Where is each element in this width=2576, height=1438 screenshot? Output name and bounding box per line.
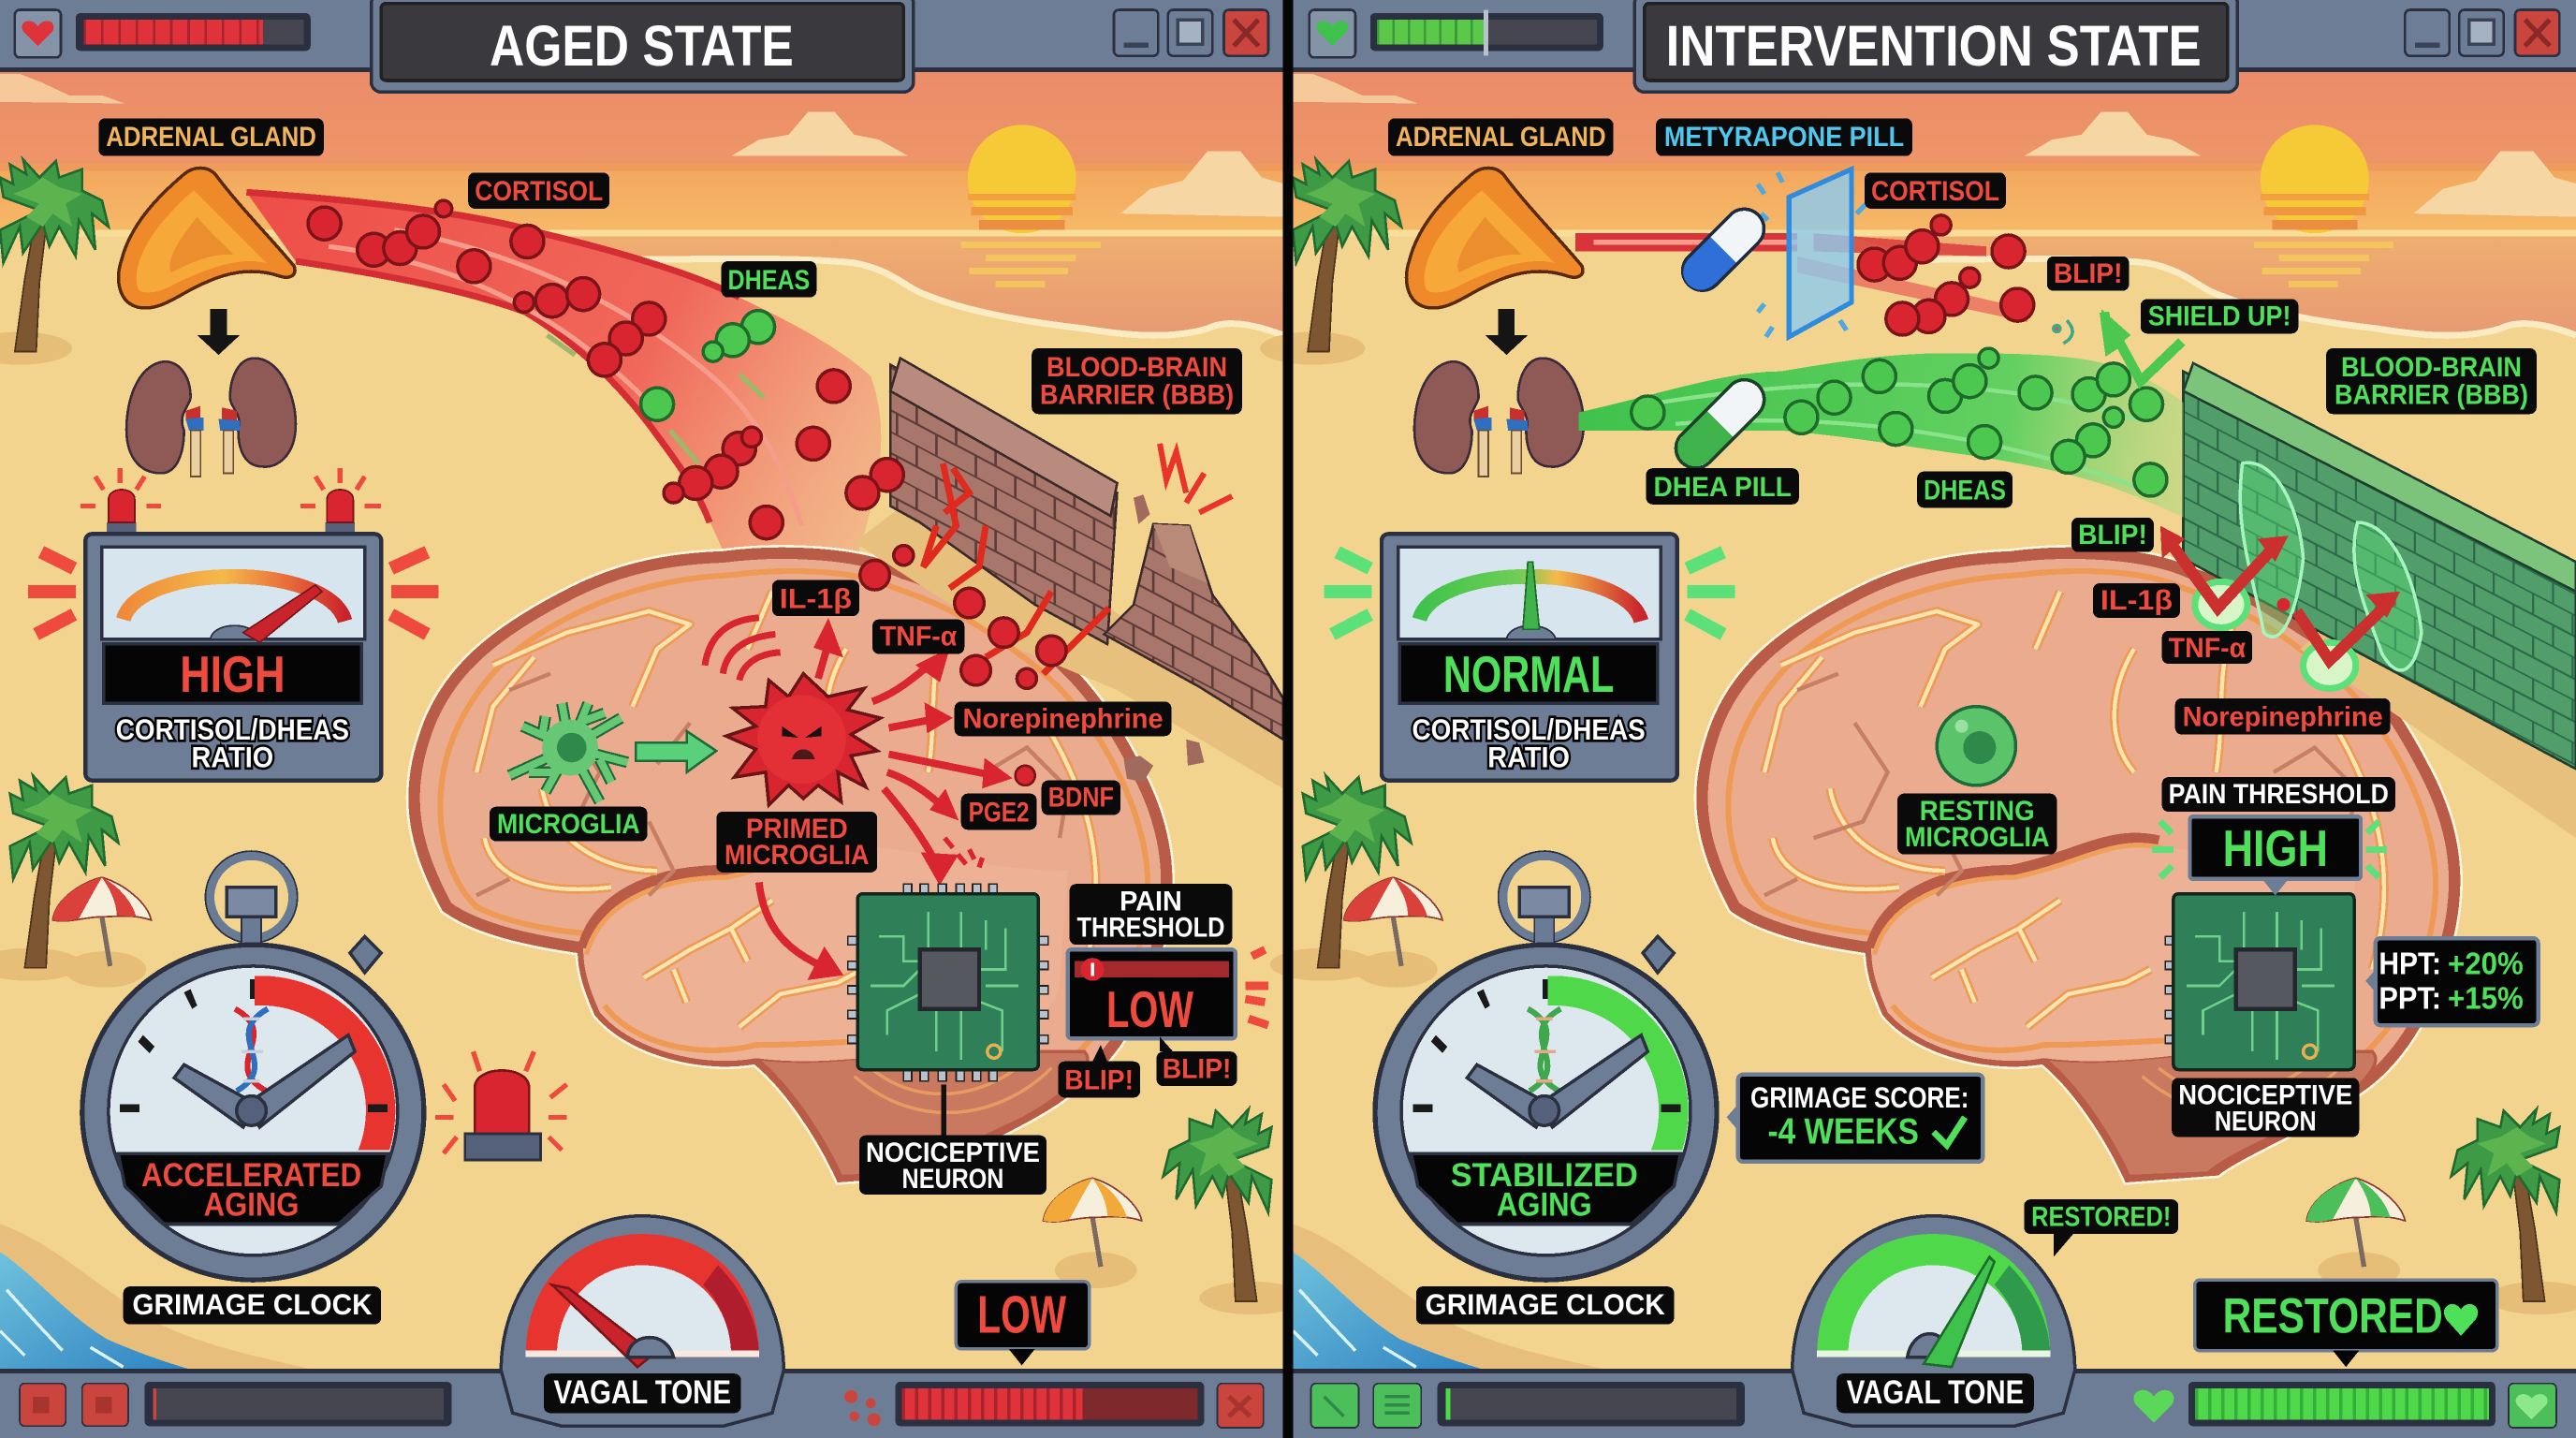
vagal tone gauge restored: VAGAL TONE [1847, 1374, 2024, 1411]
green shield arrow [2101, 309, 2182, 381]
label: IL-1β: IL-1β [780, 583, 852, 614]
kidneys [126, 309, 296, 477]
panel divider [1283, 0, 1293, 1438]
callout: grimage score [1727, 1075, 1983, 1162]
label: adrenal gland: ADRENAL GLAND [1396, 122, 1606, 153]
title [1634, 0, 2237, 92]
palm tree middle left [0, 775, 118, 981]
label: nociceptive neuron: NOCICEPTIVE [866, 1137, 1040, 1168]
label: nociceptive neuron [2172, 1078, 2359, 1137]
bottom left empty bar [145, 1382, 452, 1426]
title [372, 0, 914, 92]
palm tree top left [0, 159, 109, 365]
label: cortisol: CORTISOL [475, 176, 603, 207]
bottom status bar [1293, 1369, 2576, 1438]
label: IL-1β [772, 580, 859, 616]
blood-brain barrier wall, intact [2183, 363, 2576, 838]
beach umbrella green [2306, 1178, 2405, 1288]
label: nociceptive neuron: NOCICEPTIVE [2178, 1079, 2352, 1110]
pain threshold indicator: low: LOW [1106, 981, 1194, 1038]
arrow: microglia to primed [636, 731, 716, 772]
brain [414, 553, 1166, 1177]
adrenal gland [119, 168, 295, 308]
label: cortisol: CORTISOL [1871, 176, 1999, 207]
label: BDNF: BDNF [1048, 783, 1114, 814]
grimage clock, stabilized: STABILIZED [1451, 1157, 1638, 1194]
top title bar [1293, 0, 2576, 92]
grimage clock, stabilized: AGING [1497, 1187, 1592, 1224]
label: blood-brain barrier [1032, 348, 1242, 414]
label: shield up: SHIELD UP! [2148, 301, 2291, 331]
label: pain threshold [1070, 884, 1232, 945]
blip label 1: BLIP! [1064, 1065, 1134, 1096]
bottom right green bar [2188, 1382, 2496, 1426]
panel: aged state [0, 0, 1305, 1438]
label: primed microglia: PRIMED [746, 814, 848, 844]
metyrapone shield [1758, 169, 1866, 337]
brain [1702, 553, 2454, 1177]
cortisol dheas ratio meter, high: CORTISOL/DHEAS [116, 712, 349, 746]
label: nociceptive neuron: NEURON [902, 1164, 1003, 1195]
cortisol dheas ratio meter, normal [1325, 534, 1734, 781]
label: TNF-α: TNF-α [2169, 633, 2247, 664]
primed microglia [726, 674, 881, 805]
DHEA pill [1668, 372, 1772, 477]
microglia [509, 703, 627, 801]
vagal tone gauge low: VAGAL TONE [554, 1374, 731, 1411]
window buttons [1114, 10, 1268, 56]
beach background [0, 72, 1284, 1384]
dna helix [235, 1009, 268, 1091]
deflected red arrows [2160, 526, 2400, 688]
bottom right button [1218, 1384, 1264, 1428]
label: restored: RESTORED! [2031, 1201, 2171, 1232]
label: primed microglia: MICROGLIA [724, 840, 869, 871]
label: pain threshold: PAIN THRESHOLD [2169, 779, 2389, 810]
callout: HPT PPT: HPT: [2378, 947, 2441, 982]
protective shield halos on wall [2240, 462, 2422, 670]
small cytokine dot [1016, 766, 1035, 785]
label: restored [2024, 1199, 2178, 1257]
label: adrenal gland: ADRENAL GLAND [106, 122, 316, 153]
label: blood-brain barrier: BLOOD-BRAIN [1046, 352, 1227, 383]
label: blood-brain barrier: BARRIER (BBB) [2334, 380, 2528, 411]
grimage clock, accelerated: ACCELERATED [141, 1157, 361, 1194]
cortisol dheas ratio meter, high: HIGH [180, 646, 285, 703]
label: grimage clock: GRIMAGE CLOCK [132, 1287, 373, 1321]
cortisol dheas ratio meter, high [28, 468, 439, 781]
deflected particles [2054, 320, 2072, 344]
virus icon [844, 1390, 881, 1426]
beach background [1293, 72, 2576, 1384]
callout: HPT PPT: +20% [2448, 947, 2524, 982]
label: primed microglia [716, 812, 877, 873]
blip label 2: BLIP! [1163, 1053, 1231, 1084]
grimage clock, stabilized [1375, 851, 1717, 1280]
bottom right red bar [896, 1382, 1204, 1426]
pain threshold indicator: low [1068, 949, 1268, 1038]
palm tree bottom right [1164, 1109, 1305, 1314]
bottom status bar [0, 1369, 1283, 1438]
alarms and sparks [28, 468, 439, 634]
nociceptive neuron chip [848, 884, 1048, 1081]
bottom right heart button [2509, 1384, 2556, 1428]
DHEAS molecules [1632, 348, 2167, 496]
label: metyrapone pill: METYRAPONE PILL [1664, 122, 1904, 153]
grimage clock, accelerated [82, 851, 424, 1280]
blip label 2 [1157, 1036, 1237, 1086]
callout: grimage score: GRIMAGE SCORE: [1750, 1080, 1969, 1114]
label: grimage clock: GRIMAGE CLOCK [1426, 1287, 1665, 1321]
palm tree bottom right [2452, 1109, 2576, 1314]
callout: HPT PPT: PPT: [2378, 982, 2441, 1017]
label: resting microglia: RESTING [1920, 796, 2035, 827]
bottom left buttons [20, 1384, 128, 1426]
label: microglia: MICROGLIA [497, 809, 640, 840]
label: norepinephrine: Norepinephrine [2183, 702, 2383, 733]
health bar [1370, 10, 1603, 56]
cortisol molecules [1858, 215, 2034, 335]
cortisol beam blocked [1575, 233, 2027, 322]
icon: heart [2133, 1390, 2174, 1423]
window buttons [2405, 10, 2559, 56]
label: blood-brain barrier [2326, 348, 2537, 414]
icon: heart [15, 10, 61, 57]
label: blood-brain barrier: BLOOD-BRAIN [2341, 352, 2522, 383]
label: blip green: BLIP! [2078, 520, 2147, 550]
label: resting microglia [1897, 794, 2056, 855]
signal waves and cytokine arrows [705, 618, 1005, 976]
title: INTERVENTION STATE [1666, 14, 2202, 79]
metyrapone pill [1675, 201, 1772, 299]
label: nociceptive neuron: NEURON [2215, 1106, 2317, 1137]
label: pain threshold: PAIN [1120, 886, 1182, 917]
label: IL-1β [2093, 583, 2180, 618]
palm tree top left [1260, 159, 1401, 365]
vagal status: low: LOW [977, 1284, 1066, 1343]
panel: intervention state [1260, 0, 2576, 1438]
bottom left buttons [1311, 1384, 1421, 1428]
dna helix [1528, 1009, 1560, 1091]
DHEAS molecules [641, 311, 775, 420]
label: pain threshold: THRESHOLD [1076, 912, 1224, 943]
stream highlights [1660, 384, 2152, 493]
label: resting microglia: MICROGLIA [1905, 822, 2049, 853]
beach umbrella red [52, 877, 152, 988]
blip label 1 [1058, 1045, 1140, 1097]
cortisol dheas ratio meter, normal: NORMAL [1443, 646, 1614, 703]
health bar [76, 13, 311, 51]
label: norepinephrine: Norepinephrine [963, 703, 1164, 734]
label: nociceptive neuron [859, 1084, 1046, 1195]
adrenal gland [1407, 168, 1583, 308]
cortisol dheas ratio meter, high: RATIO [192, 741, 273, 774]
kidneys [1414, 309, 1584, 477]
vagal status: restored [2195, 1280, 2497, 1367]
grimage clock, accelerated: AGING [204, 1187, 299, 1224]
pain threshold indicator: high [2152, 816, 2387, 895]
nociceptive neuron chip [2165, 894, 2354, 1070]
label: TNF-α: TNF-α [880, 622, 958, 653]
label: DHEAS: DHEAS [1924, 476, 2006, 506]
beach umbrella orange [1044, 1178, 1142, 1288]
cortisol dheas ratio meter, normal: CORTISOL/DHEAS [1412, 712, 1646, 746]
green sparks [1325, 552, 1734, 634]
callout: grimage score: -4 WEEKS [1767, 1111, 1919, 1152]
label: IL-1β: IL-1β [2100, 585, 2173, 616]
blood-brain barrier wall, damaged [855, 359, 1283, 788]
label: blip: BLIP! [2054, 258, 2123, 289]
pain threshold indicator: high: HIGH [2223, 820, 2328, 877]
icon: heart [1310, 10, 1355, 57]
title: AGED STATE [490, 14, 794, 79]
callout: HPT PPT [2365, 938, 2539, 1025]
palm tree middle left [1270, 775, 1412, 981]
DHEA stream [1579, 353, 2183, 518]
vagal status: restored: RESTORED [2223, 1288, 2443, 1343]
label: DHEAS: DHEAS [728, 265, 810, 296]
siren [435, 1051, 567, 1160]
top title bar [0, 0, 1283, 92]
label: blood-brain barrier: BARRIER (BBB) [1040, 380, 1234, 411]
resting microglia [1937, 707, 2015, 785]
bottom left empty bar [1438, 1382, 1745, 1426]
cortisol dheas ratio meter, normal: RATIO [1487, 741, 1570, 774]
vagal status: low [956, 1282, 1090, 1365]
cortisol molecules [308, 200, 1066, 688]
beach umbrella red [1344, 877, 1442, 988]
label: PGE2: PGE2 [969, 798, 1030, 829]
label: DHEA pill: DHEA PILL [1653, 472, 1792, 503]
vagal tone gauge restored [1793, 1216, 2075, 1426]
vagal tone gauge low [501, 1216, 783, 1426]
callout: HPT PPT: +15% [2448, 982, 2524, 1017]
cortisol stream [246, 192, 881, 566]
